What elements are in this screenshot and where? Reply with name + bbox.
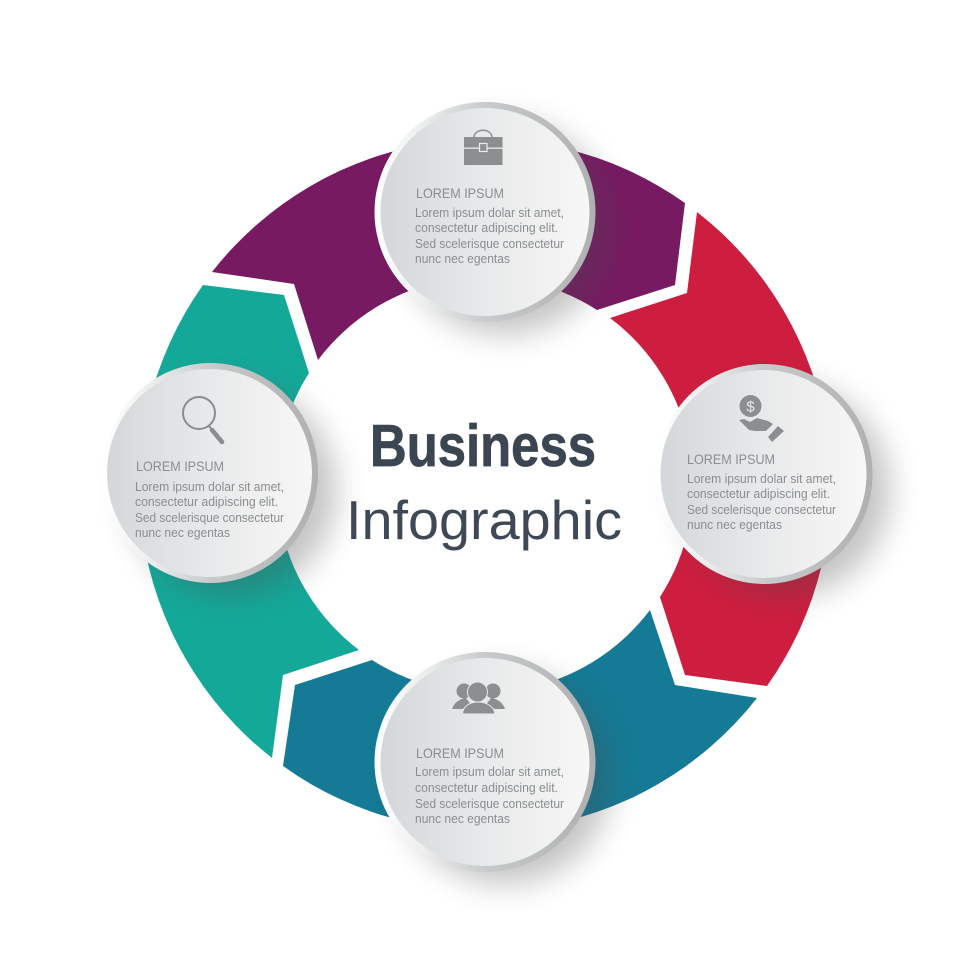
panel heading: LOREM IPSUM: [416, 185, 504, 201]
segment: red arrow: [610, 212, 831, 686]
panel text: Lorem ipsum dolar sit amet,: [135, 479, 284, 494]
panel text: Sed scelerisque consectetur: [687, 502, 837, 517]
panel text: [415, 205, 565, 266]
panel: bottom circle: [374, 652, 611, 884]
icon: briefcase: [464, 130, 502, 165]
circle rim: [374, 652, 596, 872]
panel text: consectetur adipiscing elit.: [687, 486, 830, 501]
panel text: nunc nec egentas: [415, 251, 510, 266]
panel heading: LOREM IPSUM: [136, 458, 224, 474]
panel heading: LOREM IPSUM: [416, 745, 504, 761]
title: [346, 413, 622, 551]
panel text: nunc nec egentas: [415, 811, 510, 826]
circle shadow: [399, 122, 611, 334]
icon: hand with coin: $: [746, 398, 755, 416]
panel text: Lorem ipsum dolar sit amet,: [687, 471, 836, 486]
panel text: Lorem ipsum dolar sit amet,: [415, 764, 564, 779]
panel text: Sed scelerisque consectetur: [415, 796, 565, 811]
panel text: nunc nec egentas: [687, 517, 782, 532]
panel text: [135, 479, 285, 540]
circle shadow: [682, 384, 890, 596]
ring of four arrow segments: [139, 139, 831, 831]
panel text: consectetur adipiscing elit.: [135, 494, 278, 509]
circle shadow: [399, 672, 611, 884]
panel: right circle: [656, 364, 890, 596]
panel heading: LOREM IPSUM: [687, 451, 775, 467]
panel: left circle: [103, 363, 336, 596]
panel text: Sed scelerisque consectetur: [135, 510, 285, 525]
panel text: [687, 471, 837, 532]
panel text: nunc nec egentas: [135, 525, 230, 540]
panel text: consectetur adipiscing elit.: [415, 780, 558, 795]
circle rim: [374, 102, 596, 322]
circle face: [380, 108, 590, 316]
segment: green arrow: [139, 285, 359, 758]
circle rim: [656, 364, 872, 584]
panel text: Lorem ipsum dolar sit amet,: [415, 205, 564, 220]
circle face: [107, 369, 312, 577]
panel text: [415, 764, 565, 826]
circle rim: [103, 363, 318, 583]
panel: top circle: [374, 102, 611, 334]
circle face: [380, 658, 590, 866]
circle face: [660, 370, 866, 578]
segment: purple arrow: [212, 139, 685, 360]
title line: Infographic: Infographic: [346, 489, 622, 551]
segment: blue arrow: [283, 610, 757, 831]
title line: Business: Business: [370, 413, 596, 479]
icon: magnifying glass: [183, 397, 222, 442]
circle shadow: [128, 384, 336, 596]
icon: group of people: [452, 682, 505, 714]
panel text: consectetur adipiscing elit.: [415, 220, 558, 235]
panel text: Sed scelerisque consectetur: [415, 236, 565, 251]
icon: hand with coin: [739, 395, 784, 442]
